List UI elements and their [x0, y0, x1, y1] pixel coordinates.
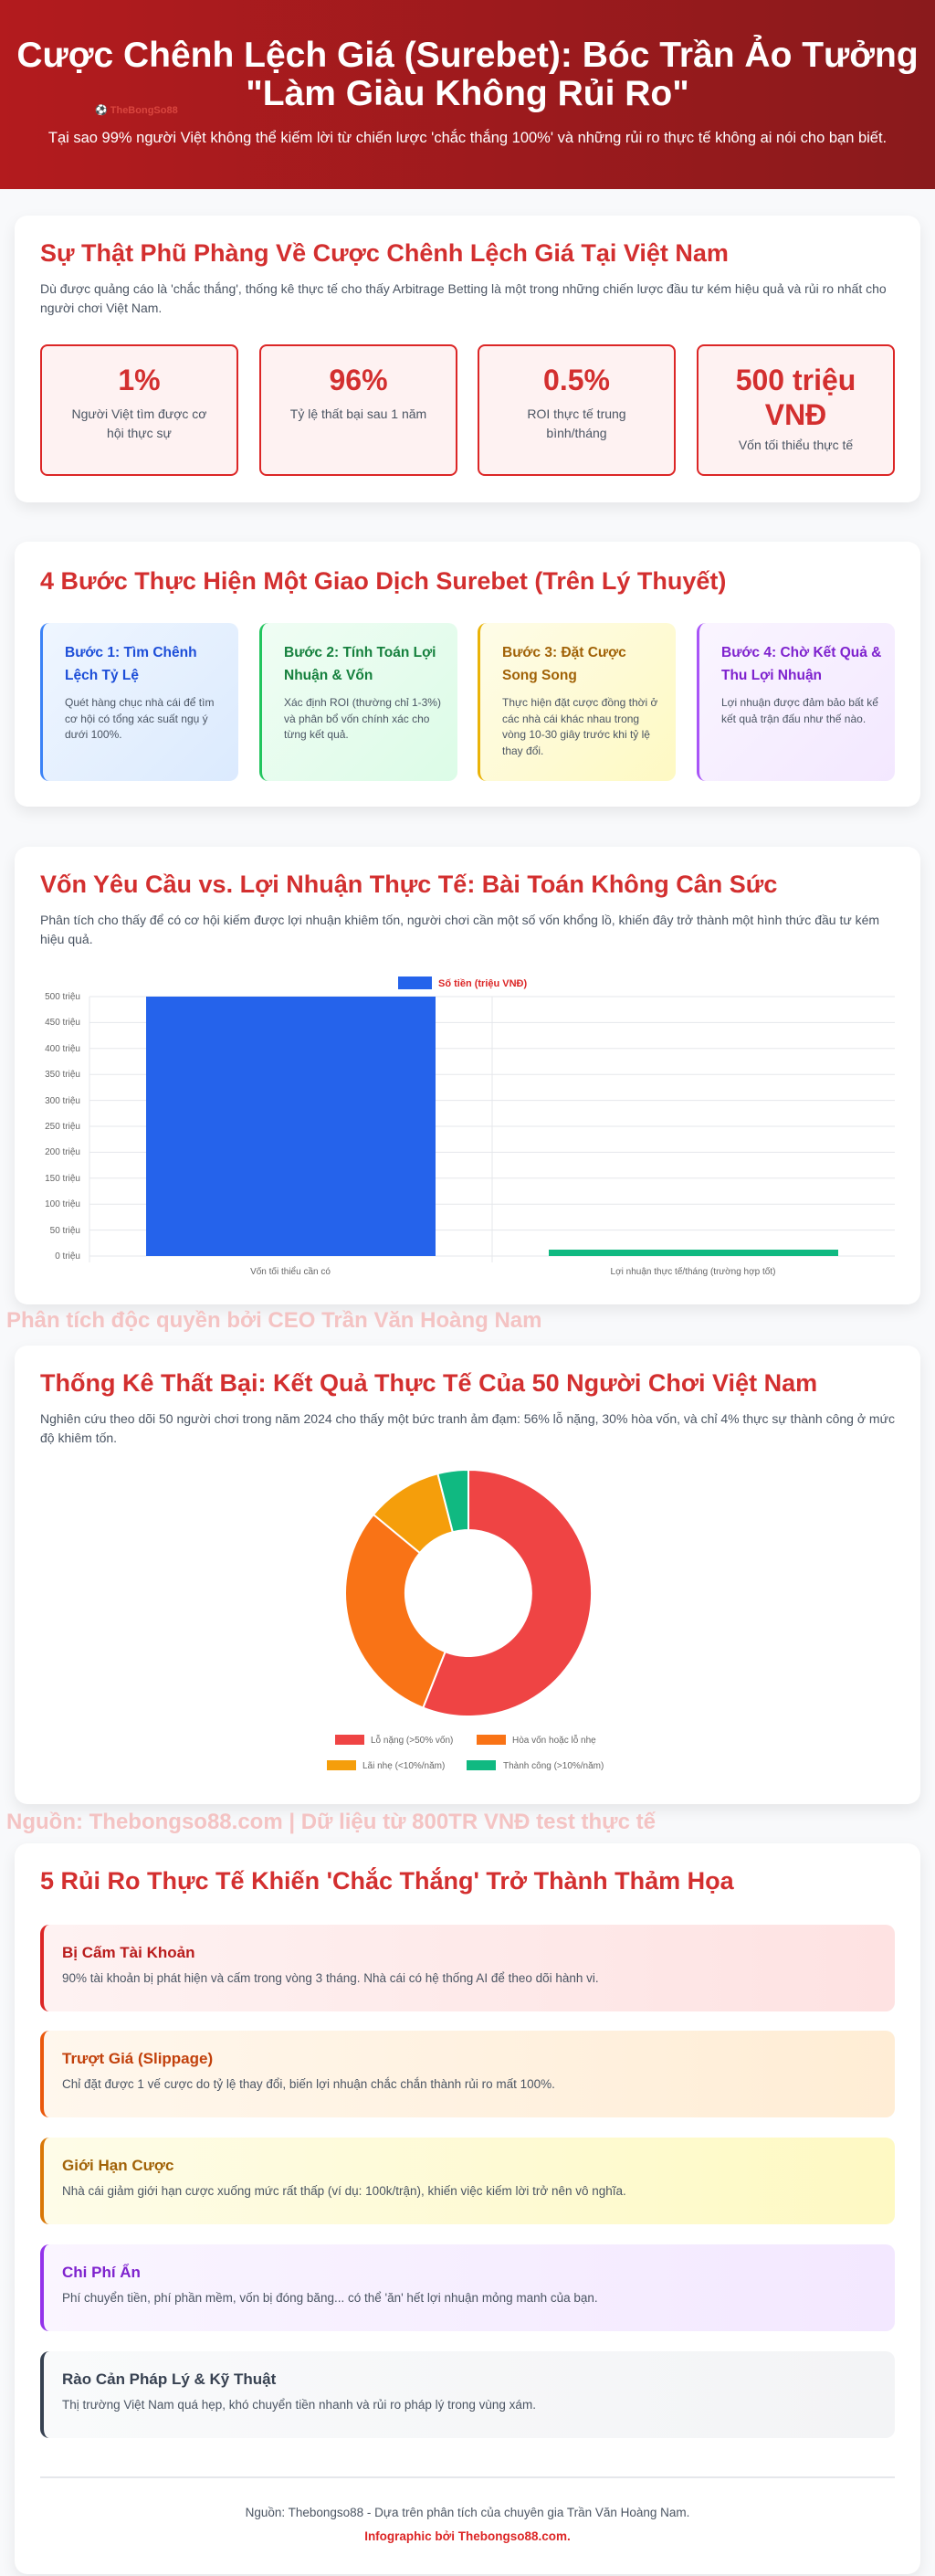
- legend: Lỗ nặng (>50% vốn): [371, 1734, 453, 1746]
- footer: Nguồn: Thebongso88 - Dựa trên phân tích của chuyên gia Trần Văn Hoàng Nam.: [246, 2506, 689, 2519]
- risk 1: Bị Cấm Tài Khoản: [62, 1944, 194, 1961]
- stat: 0.5%: 0.5%: [543, 364, 610, 396]
- bar: capital: [146, 997, 436, 1256]
- watermark: source: Nguồn: Thebongso88.com | Dữ liệu từ 800TR VNĐ test thực tế: [6, 1810, 656, 1834]
- stat: 0.5%: [478, 344, 676, 476]
- stat: 0.5%: ROI thực tế trung bình/tháng: [527, 406, 626, 440]
- step 1: Bước 1: Tìm Chênh Lệch Tỷ Lệ: [65, 645, 197, 683]
- risk 3: Nhà cái giảm giới hạn cược xuống mức rất thấp (ví dụ: 100k/trận), khiến việc kiếm lời trở nên vô nghĩa.: [62, 2184, 626, 2198]
- intro text: Dù được quảng cáo là 'chắc thắng', thống kê thực tế cho thấy Arbitrage Betting là một trong những chiến lược đầu tư kém hiệu quả và rủi ro nhất cho người chơi Việt Nam.: [40, 281, 887, 315]
- x axis labels: [250, 1266, 775, 1277]
- footer: [246, 2506, 689, 2543]
- legend: Thành công (>10%/năm): [503, 1761, 604, 1771]
- risk 5: Rào Cản Pháp Lý & Kỹ Thuật: [62, 2370, 276, 2388]
- donut chart: [327, 1471, 604, 1771]
- step 2: Xác định ROI (thường chỉ 1-3%) và phân bổ vốn chính xác cho từng kết quả.: [284, 696, 441, 741]
- heading: 5 Rủi Ro Thực Tế Khiến 'Chắc Thắng' Trở Thành Thảm Họa: [40, 1867, 734, 1895]
- step 2: Bước 2: Tính Toán Lợi Nhuận & Vốn: [284, 645, 436, 683]
- step 1: [40, 623, 238, 781]
- stat: 96%: 96%: [329, 364, 388, 396]
- risk 4: Phí chuyển tiền, phí phần mềm, vốn bị đóng băng... có thể 'ăn' hết lợi nhuận mỏng manh của bạn.: [62, 2291, 598, 2305]
- bar chart: [45, 977, 895, 1277]
- watermark: CEO analysis: Phân tích độc quyền bởi CEO Trần Văn Hoàng Nam: [6, 1308, 541, 1333]
- x axis labels: Lợi nhuận thực tế/tháng (trường hợp tốt): [611, 1266, 775, 1277]
- risk 4: [40, 2244, 895, 2331]
- stat: 96%: [259, 344, 457, 476]
- stat: 1%: [40, 344, 238, 476]
- y axis labels: 0 triệu: [55, 1251, 80, 1262]
- subtitle: Tại sao 99% người Việt không thể kiếm lời từ chiến lược 'chắc thắng 100%' và những rủi ro thực tế không ai nói cho bạn biết.: [48, 130, 887, 146]
- x axis labels: Vốn tối thiểu cần có: [250, 1266, 331, 1277]
- y axis labels: 200 triệu: [45, 1147, 80, 1157]
- intro text: Nghiên cứu theo dõi 50 người chơi trong năm 2024 cho thấy một bức tranh ảm đạm: 56% lỗ nặng, 30% hòa vốn, và chỉ 4% thực sự thành công ở mức độ khiêm tốn.: [40, 1411, 895, 1445]
- panel: 5 risks: [15, 1843, 920, 2574]
- y axis labels: 500 triệu: [45, 992, 80, 1002]
- step 3: Bước 3: Đặt Cược Song Song: [502, 645, 626, 683]
- stat: 500 triệu: VNĐ: [765, 398, 826, 431]
- panel: 4 steps: [15, 542, 920, 807]
- panel: failure stats: [15, 1346, 920, 1804]
- title: "Làm Giàu Không Rủi Ro": [246, 74, 689, 113]
- logo watermark: ⚽ TheBongSo88: [95, 105, 178, 116]
- stat: 1%: 1%: [118, 364, 161, 396]
- intro text: Phân tích cho thấy để có cơ hội kiếm được lợi nhuận khiêm tốn, người chơi cần một số vốn khổng lồ, khiến đây trở thành một hình thức đầu tư kém hiệu quả.: [40, 913, 879, 946]
- stat: 500 triệu: Vốn tối thiểu thực tế: [739, 438, 853, 452]
- bar: profit: [549, 1250, 838, 1256]
- step 3: Thực hiện đặt cược đồng thời ở các nhà cái khác nhau trong vòng 10-30 giây trước khi tỷ lệ thay đổi.: [502, 696, 657, 756]
- y axis labels: 450 triệu: [45, 1018, 80, 1028]
- step 4: Bước 4: Chờ Kết Quả & Thu Lợi Nhuận: [721, 645, 881, 683]
- risk 5: [40, 2351, 895, 2438]
- panel: capital vs profit: [15, 847, 920, 1304]
- title: Cược Chênh Lệch Giá (Surebet): Bóc Trần Ảo Tưởng: [16, 36, 919, 75]
- y axis labels: 150 triệu: [45, 1174, 80, 1184]
- stat: 500 triệu: [697, 344, 895, 476]
- footer: Infographic bởi Thebongso88.com.: [364, 2529, 571, 2543]
- step 1: Quét hàng chục nhà cái để tìm cơ hội có tổng xác suất ngụ ý dưới 100%.: [65, 696, 214, 741]
- legend: Lãi nhẹ (<10%/năm): [362, 1761, 445, 1771]
- header banner: [0, 0, 935, 189]
- y axis labels: 350 triệu: [45, 1070, 80, 1080]
- heading: Thống Kê Thất Bại: Kết Quả Thực Tế Của 50 Người Chơi Việt Nam: [40, 1369, 817, 1397]
- panel: harsh truth: [15, 216, 920, 502]
- y axis labels: 50 triệu: [50, 1226, 80, 1236]
- step 3: [478, 623, 676, 781]
- legend: Hòa vốn hoặc lỗ nhẹ: [512, 1734, 596, 1746]
- stat: 96%: Tỷ lệ thất bại sau 1 năm: [290, 406, 426, 421]
- risk 1: [40, 1925, 895, 2011]
- step 4: Lợi nhuận được đảm bảo bất kể kết quả trận đấu như thế nào.: [721, 696, 878, 725]
- y axis labels: 100 triệu: [45, 1199, 80, 1209]
- stat: 1%: Người Việt tìm được cơ hội thực sự: [72, 406, 206, 440]
- heading: Sự Thật Phũ Phàng Về Cược Chênh Lệch Giá Tại Việt Nam: [40, 239, 729, 267]
- step 2: [259, 623, 457, 781]
- y axis labels: 250 triệu: [45, 1122, 80, 1132]
- risk 3: [40, 2138, 895, 2224]
- risk 1: 90% tài khoản bị phát hiện và cấm trong vòng 3 tháng. Nhà cái có hệ thống AI để theo dõi hành vi.: [62, 1971, 599, 1985]
- risk 2: Trượt Giá (Slippage): [62, 2050, 213, 2067]
- risk 2: Chỉ đặt được 1 vế cược do tỷ lệ thay đổi, biến lợi nhuận chắc chắn thành rủi ro mất 100%.: [62, 2077, 555, 2091]
- step 4: [697, 623, 895, 781]
- legend: Số tiền (triệu VNĐ): [438, 978, 528, 989]
- risk 4: Chi Phí Ẩn: [62, 2264, 141, 2281]
- legend: [327, 1734, 604, 1771]
- y axis labels: 400 triệu: [45, 1044, 80, 1054]
- risk 2: [40, 2031, 895, 2117]
- risk 3: Giới Hạn Cược: [62, 2157, 173, 2174]
- y axis labels: [45, 992, 80, 1262]
- y axis labels: 300 triệu: [45, 1096, 80, 1106]
- legend: [398, 977, 528, 989]
- heading: 4 Bước Thực Hiện Một Giao Dịch Surebet (Trên Lý Thuyết): [40, 567, 726, 595]
- stat: 500 triệu: 500 triệu: [736, 364, 856, 396]
- risk 5: Thị trường Việt Nam quá hẹp, khó chuyển tiền nhanh và rủi ro pháp lý trong vùng xám.: [62, 2398, 536, 2412]
- heading: Vốn Yêu Cầu vs. Lợi Nhuận Thực Tế: Bài Toán Không Cân Sức: [40, 871, 777, 898]
- title: [16, 35, 919, 113]
